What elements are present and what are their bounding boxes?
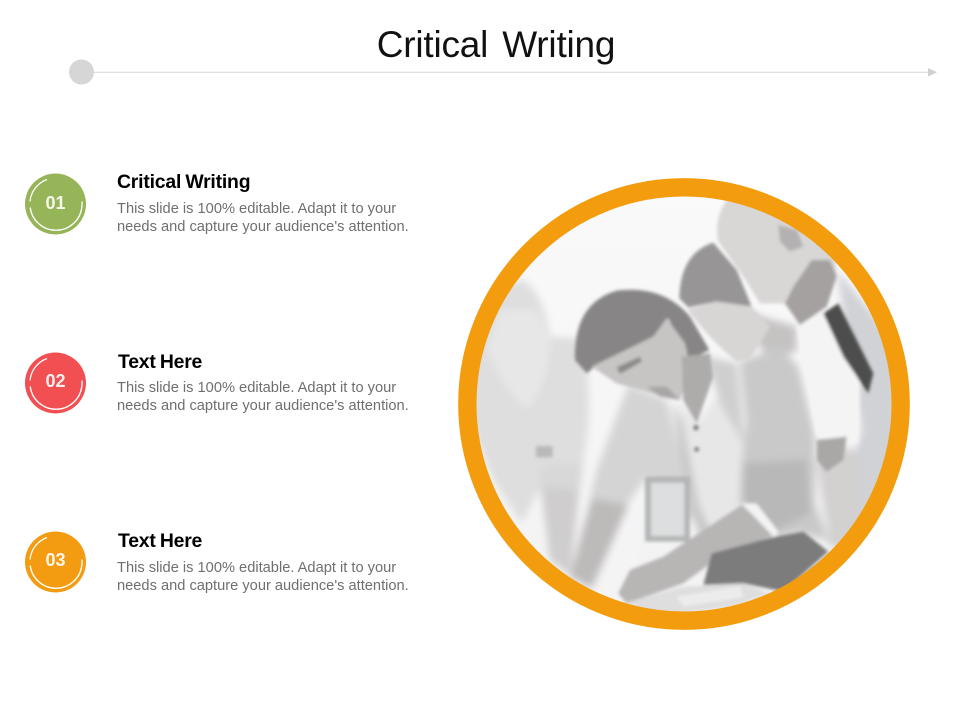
right man torso xyxy=(827,270,897,557)
man face xyxy=(592,318,691,400)
text block 1: needs and capture your audience's attention. xyxy=(117,219,409,235)
text block 2 xyxy=(117,380,409,414)
title: Critical Writing xyxy=(377,24,615,65)
woman face xyxy=(687,302,770,362)
right man white shirt xyxy=(797,312,860,443)
heading 3: Text Here xyxy=(118,530,202,552)
right man head xyxy=(716,201,837,304)
text block 2: needs and capture your audience's attention. xyxy=(117,398,409,414)
badge 03: 03 xyxy=(45,550,66,570)
badge 03 xyxy=(25,532,86,592)
buttons xyxy=(693,425,699,430)
papers xyxy=(629,584,768,612)
timeline rule with dot and arrow xyxy=(69,60,937,84)
badge 02: 02 xyxy=(45,371,66,391)
text block 3: This slide is 100% editable. Adapt it to your xyxy=(117,560,396,576)
badge 01: 01 xyxy=(45,193,66,213)
foreground arm and hand xyxy=(618,505,775,603)
right man ear xyxy=(778,225,803,252)
text block 1 xyxy=(117,201,409,235)
orange ring xyxy=(467,187,901,621)
text block 3 xyxy=(117,560,409,594)
tie xyxy=(823,303,873,393)
badge 01 xyxy=(25,174,86,234)
man shirt xyxy=(683,402,744,522)
badge 02 xyxy=(25,352,86,414)
text block 3: needs and capture your audience's attention. xyxy=(117,578,409,594)
hand on arm xyxy=(817,437,847,472)
lower dark skirt xyxy=(703,532,828,592)
right man arm xyxy=(814,446,858,535)
woman sweater xyxy=(740,347,828,540)
left woman xyxy=(470,280,589,523)
man sleeve xyxy=(590,385,698,523)
heading 1: Critical Writing xyxy=(117,171,250,193)
woman neck xyxy=(750,313,797,357)
monitor in background xyxy=(645,477,690,542)
man hair xyxy=(575,290,709,373)
text block 1: This slide is 100% editable. Adapt it to your xyxy=(117,201,396,217)
woman hair xyxy=(679,243,752,307)
heading 2: Text Here xyxy=(118,351,202,373)
text block 2: This slide is 100% editable. Adapt it to your xyxy=(117,380,396,396)
circular team photo with orange ring xyxy=(458,178,910,630)
